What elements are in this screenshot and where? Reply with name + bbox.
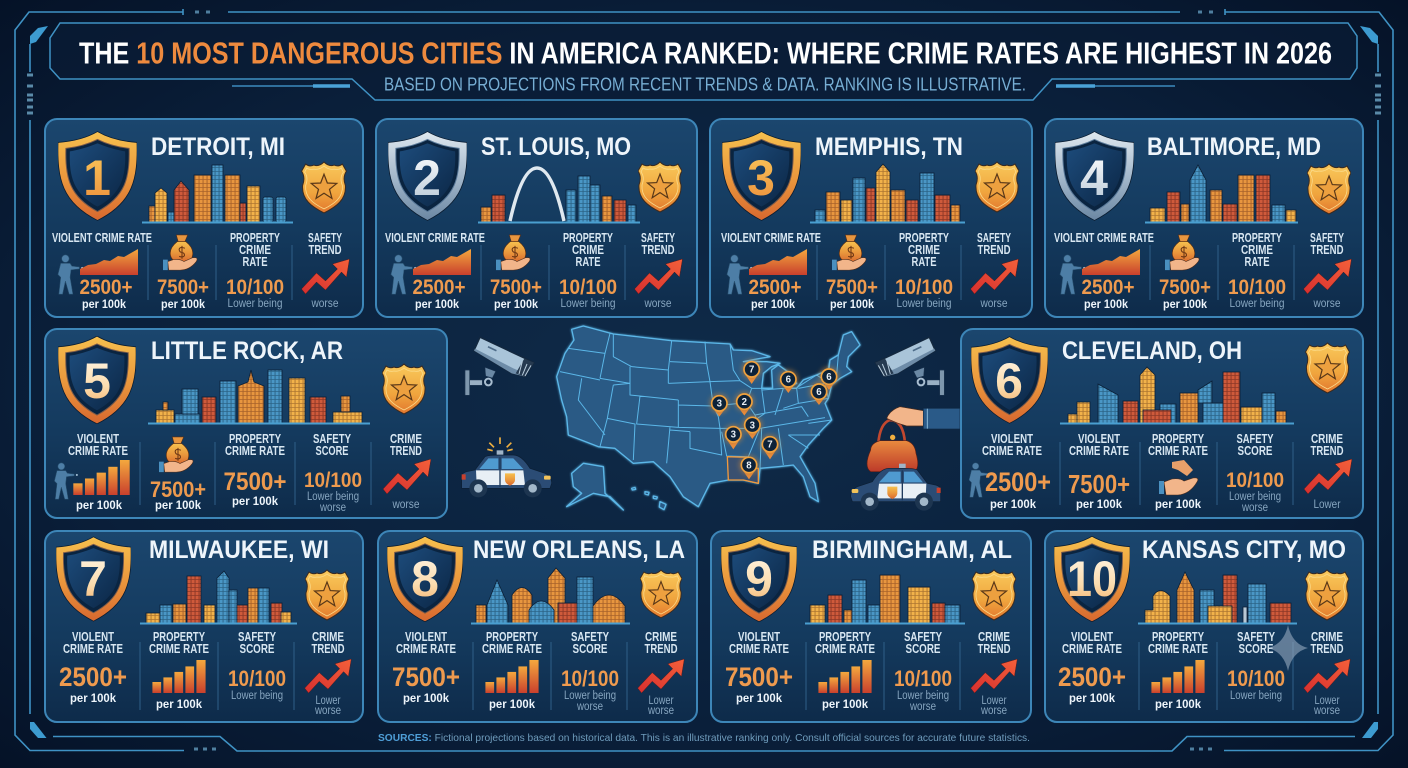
icon: police badge	[638, 162, 682, 212]
crime trend	[1304, 432, 1352, 511]
violent crime rate: VIOLENT CRIME RATE	[52, 231, 152, 245]
crime trend: TREND	[1310, 444, 1344, 458]
city name: DETROIT, MI	[151, 133, 285, 161]
icon: police badge	[972, 570, 1016, 620]
violent crime rate: VIOLENT CRIME RATE	[1054, 231, 1154, 245]
property crime rate	[1228, 231, 1286, 310]
safety score: SAFETY	[1237, 630, 1276, 644]
violent crime rate	[52, 231, 152, 311]
safety score: 10/100	[1227, 666, 1285, 691]
panel: Kansas City, MO	[1045, 531, 1363, 722]
safety score	[1226, 432, 1284, 514]
violent crime rate: VIOLENT	[1071, 630, 1113, 644]
violent crime rate: per 100k	[70, 691, 116, 705]
property crime rate: per 100k	[489, 697, 535, 711]
icon: police badge	[1306, 343, 1350, 393]
metrics: Baltimore	[1054, 231, 1352, 311]
property crime rate: RATE	[576, 255, 600, 269]
skyline	[1138, 572, 1297, 624]
card background	[45, 119, 363, 317]
card background	[378, 531, 697, 722]
violent crime rate	[54, 432, 130, 512]
safety score: SCORE	[1238, 444, 1272, 458]
property crime rate: Lower being	[896, 298, 952, 310]
violent crime rate: 2500+	[748, 276, 802, 299]
property value: 7500+	[157, 276, 209, 299]
property value: 7500+	[150, 477, 206, 502]
map pins	[711, 362, 837, 479]
violent crime rate	[1054, 231, 1154, 311]
rank shield 7: 7	[79, 551, 107, 607]
safety trend: SAFETY	[308, 231, 342, 245]
violent crime rate: VIOLENT	[72, 630, 114, 644]
property crime rate: PROPERTY	[563, 231, 613, 245]
property value: 7500+	[826, 276, 878, 299]
property crime rate: PROPERTY	[899, 231, 949, 245]
rank shield 6: 6	[995, 353, 1023, 409]
panel: Baltimore, MD	[1045, 119, 1363, 317]
property crime rate: Lower being	[1230, 298, 1284, 310]
violent crime rate: CRIME RATE	[729, 642, 789, 656]
property crime rate: CRIME	[908, 243, 940, 257]
violent crime rate: 2500+	[1058, 662, 1126, 692]
violent crime rate: per 100k	[403, 691, 449, 705]
property value: per 100k	[161, 297, 205, 311]
violent crime rate: per 100k	[82, 297, 126, 311]
icon: police badge	[1307, 164, 1351, 214]
US map with side icons	[461, 326, 960, 511]
property crime rate: CRIME RATE	[149, 642, 209, 656]
violent crime rate: 7500+	[725, 662, 793, 692]
violent crime rate: VIOLENT	[738, 630, 780, 644]
crime trend	[383, 432, 431, 511]
icon: hand with sleeve	[887, 407, 960, 429]
panel: Little Rock, AR	[45, 329, 447, 518]
skyline	[140, 571, 297, 624]
rank shield 9	[721, 536, 797, 622]
rank shield 10	[1054, 536, 1130, 622]
property crime rate: CRIME RATE	[482, 642, 542, 656]
violent crime rate: per 100k	[415, 297, 459, 311]
safety score: Lower being	[1229, 491, 1281, 503]
property crime rate	[895, 231, 953, 310]
metrics: Little Rock	[54, 432, 431, 514]
icon: police badge	[382, 364, 426, 414]
violent crime rate	[385, 231, 485, 311]
property crime rate: PROPERTY	[229, 432, 281, 446]
property crime rate: per 100k	[232, 494, 278, 508]
crime trend: worse	[647, 705, 674, 717]
Louisiana highlight	[727, 457, 758, 483]
property crime rate	[1148, 630, 1208, 711]
property crime rate: 10/100	[226, 276, 284, 299]
crime trend: worse	[392, 499, 420, 511]
city name: CLEVELAND, OH	[1062, 337, 1242, 365]
safety trend: TREND	[1310, 243, 1344, 257]
rank shield 9: 9	[745, 551, 773, 607]
icon: police badge	[640, 570, 682, 618]
violent crime rate: per 100k	[1069, 691, 1115, 705]
property crime rate: RATE	[912, 255, 936, 269]
city name: ST. LOUIS, MO	[481, 133, 631, 161]
property value: per 100k	[155, 498, 201, 512]
property crime rate: PROPERTY	[819, 630, 871, 644]
property crime rate: PROPERTY	[153, 630, 205, 644]
property value	[490, 235, 542, 311]
property crime rate	[482, 630, 542, 711]
crime trend: CRIME	[390, 432, 422, 446]
crime trend	[305, 630, 351, 717]
rank shield 3	[722, 132, 801, 220]
pin 7: 7	[749, 365, 754, 376]
property crime rate: CRIME	[572, 243, 604, 257]
property crime rate	[559, 231, 617, 310]
icon: police badge	[975, 162, 1019, 212]
property crime rate: RATE	[1244, 255, 1270, 269]
violent crime rate: per 100k	[1084, 297, 1128, 311]
property value	[157, 235, 209, 311]
skyline	[471, 568, 630, 624]
violent crime rate second column: per 100k	[1076, 497, 1122, 511]
violent crime rate: VIOLENT	[77, 432, 119, 446]
violent crime rate: per 100k	[751, 297, 795, 311]
rank shield 8	[387, 536, 463, 622]
sources note: SOURCES: Fictional projections based on historical data. This is an illustrative ranking only. Consult official sources for accurate future statistics.	[378, 732, 1030, 744]
safety score: worse	[1241, 502, 1268, 514]
property crime rate: PROPERTY	[1152, 432, 1204, 446]
city name: MEMPHIS, TN	[815, 133, 963, 161]
property crime rate: CRIME	[239, 243, 271, 257]
property crime rate: 10/100	[559, 276, 617, 299]
skyline	[478, 168, 640, 222]
safety trend: worse	[980, 298, 1008, 310]
metrics: Birmingham	[725, 630, 1017, 717]
pin 7: 7	[767, 440, 773, 451]
crime trend: CRIME	[312, 630, 344, 644]
crime trend: CRIME	[645, 630, 677, 644]
rank shield 7	[56, 537, 131, 621]
crime trend: worse	[1313, 705, 1340, 717]
safety score: SAFETY	[1236, 432, 1274, 446]
safety trend: worse	[311, 298, 338, 310]
city name: KANSAS CITY, MO	[1142, 536, 1346, 564]
skyline	[142, 165, 293, 222]
safety score: SAFETY	[238, 630, 277, 644]
pin 2: 2	[742, 397, 747, 408]
safety score: worse	[909, 701, 936, 713]
violent crime rate	[721, 231, 821, 311]
panel: New Orleans, LA	[378, 531, 697, 722]
violent crime rate second column	[1068, 432, 1130, 511]
pin 6: 6	[786, 375, 792, 386]
violent crime rate	[1058, 630, 1126, 705]
city name: BALTIMORE, MD	[1147, 133, 1321, 161]
property value	[1159, 235, 1211, 311]
crime trend: Lower	[316, 695, 341, 707]
violent crime rate: 2500+	[80, 276, 132, 299]
metrics: Memphis	[721, 231, 1018, 311]
skyline	[1060, 367, 1294, 424]
crime trend: CRIME	[1311, 432, 1343, 446]
property crime rate: per 100k	[1155, 697, 1201, 711]
icon: police badge	[302, 162, 346, 213]
violent crime rate: CRIME RATE	[68, 444, 128, 458]
crime trend: CRIME	[1311, 630, 1343, 644]
property crime rate: per 100k	[156, 697, 202, 711]
rank shield 5: 5	[83, 353, 111, 409]
violent crime rate: CRIME RATE	[396, 642, 456, 656]
icon: right security camera	[875, 337, 944, 395]
safety trend: TREND	[978, 243, 1010, 257]
safety score: Lower being	[897, 690, 949, 702]
violent crime rate: 2500+	[985, 467, 1051, 497]
icon: police car left	[461, 437, 552, 497]
crime trend: TREND	[390, 444, 422, 458]
panel: Milwaukee, WI	[45, 531, 363, 722]
rank shield 5	[58, 336, 136, 424]
property crime rate: per 100k	[1155, 497, 1201, 511]
icon: police badge	[305, 570, 349, 620]
property crime rate: Lower being	[228, 298, 282, 310]
property crime rate: CRIME RATE	[225, 444, 285, 458]
panel: St. Louis, MO	[376, 119, 697, 317]
safety trend	[970, 231, 1018, 310]
property crime rate: PROPERTY	[1152, 630, 1204, 644]
rank shield 1	[58, 132, 137, 220]
rank shield 6	[971, 337, 1048, 423]
rank shield 8: 8	[411, 551, 439, 607]
safety score: SAFETY	[313, 432, 352, 446]
crime trend: Lower	[1314, 499, 1341, 511]
violent crime rate	[969, 432, 1051, 511]
property value: 7500+	[1159, 276, 1211, 299]
property crime rate	[226, 231, 284, 310]
violent crime rate second column: 7500+	[1068, 469, 1130, 499]
metrics: St. Louis	[385, 231, 682, 311]
crime trend: Lower	[1314, 695, 1340, 707]
property crime rate: 7500+	[224, 468, 286, 496]
icon: red purse	[867, 420, 918, 472]
property crime rate	[149, 630, 209, 711]
pin 3: 3	[731, 430, 737, 441]
safety score	[1227, 630, 1285, 702]
skyline	[810, 164, 965, 222]
safety trend: SAFETY	[1310, 231, 1344, 245]
property crime rate: CRIME RATE	[1148, 642, 1208, 656]
rank shield 4	[1055, 132, 1134, 220]
card background	[1045, 119, 1363, 317]
violent crime rate second column: CRIME RATE	[1069, 444, 1129, 458]
crime trend: worse	[314, 705, 341, 717]
pin 8: 8	[746, 460, 752, 471]
safety trend: SAFETY	[641, 231, 675, 245]
panel: Cleveland, OH	[961, 329, 1363, 518]
safety score: 10/100	[228, 666, 286, 691]
violent crime rate: CRIME RATE	[63, 642, 123, 656]
crime trend: Lower	[648, 695, 674, 707]
property crime rate: per 100k	[822, 697, 868, 711]
safety score: SCORE	[906, 642, 940, 656]
safety trend: SAFETY	[977, 231, 1011, 245]
rank shield 2: 2	[413, 150, 441, 206]
safety score	[228, 630, 286, 702]
safety score: worse	[319, 502, 346, 514]
card background	[45, 531, 363, 722]
safety score: Lower being	[231, 690, 283, 702]
crime trend: TREND	[644, 642, 678, 656]
rank shield 3: 3	[747, 150, 775, 206]
violent crime rate: VIOLENT	[991, 432, 1033, 446]
property value	[150, 437, 206, 512]
property value: per 100k	[494, 297, 538, 311]
violent crime rate: VIOLENT CRIME RATE	[385, 231, 485, 245]
safety score	[304, 432, 362, 514]
safety trend: TREND	[642, 243, 674, 257]
safety trend	[302, 231, 350, 310]
safety score: 10/100	[894, 666, 952, 691]
rank shield 10: 10	[1067, 551, 1117, 607]
property crime rate: RATE	[242, 255, 268, 269]
card background	[1045, 531, 1363, 722]
map of the United States	[557, 326, 860, 510]
violent crime rate: 2500+	[1082, 276, 1134, 299]
card background	[376, 119, 697, 317]
title banner	[50, 23, 1357, 100]
violent crime rate: per 100k	[736, 691, 782, 705]
property crime rate: PROPERTY	[230, 231, 280, 245]
violent crime rate: VIOLENT	[405, 630, 447, 644]
pin 3: 3	[717, 399, 723, 410]
rank shield 4: 4	[1080, 150, 1108, 206]
pin 3: 3	[750, 420, 756, 431]
crime trend: worse	[980, 705, 1007, 717]
rank shield 1: 1	[83, 150, 111, 206]
violent crime rate: CRIME RATE	[1062, 642, 1122, 656]
crime trend	[1304, 630, 1350, 717]
property crime rate	[224, 432, 286, 508]
crime trend: Lower	[982, 695, 1007, 707]
property crime rate: CRIME	[1241, 243, 1273, 257]
skyline	[1145, 165, 1298, 222]
metrics: Cleveland	[969, 432, 1352, 514]
safety score: worse	[576, 701, 603, 713]
crime trend: TREND	[312, 642, 344, 656]
safety trend: worse	[1313, 298, 1340, 310]
crime trend: TREND	[1310, 642, 1344, 656]
property crime rate: 10/100	[1228, 276, 1286, 299]
property crime rate: PROPERTY	[486, 630, 538, 644]
property crime rate: PROPERTY	[1232, 231, 1282, 245]
safety score: SCORE	[572, 642, 608, 656]
icon: police car right	[851, 464, 941, 511]
property crime rate: CRIME RATE	[1148, 444, 1208, 458]
property crime rate: 10/100	[895, 276, 953, 299]
safety trend: TREND	[308, 243, 342, 257]
pin 6: 6	[826, 372, 832, 383]
violent crime rate: per 100k	[76, 498, 122, 512]
safety score: Lower being	[1230, 690, 1282, 702]
safety score: 10/100	[304, 469, 362, 492]
panel: Birmingham, AL	[711, 531, 1031, 722]
violent crime rate: per 100k	[990, 497, 1036, 511]
city name: BIRMINGHAM, AL	[812, 536, 1012, 564]
safety score: 10/100	[561, 666, 619, 691]
rank shield 2	[388, 132, 467, 220]
property crime rate	[815, 630, 875, 711]
violent crime rate: 2500+	[412, 276, 466, 299]
panel: Memphis, TN	[710, 119, 1032, 317]
violent crime rate	[725, 630, 793, 705]
safety score: SCORE	[316, 444, 348, 458]
property crime rate: CRIME RATE	[815, 642, 875, 656]
property crime rate: Lower being	[560, 298, 616, 310]
safety trend: worse	[644, 298, 672, 310]
safety score: SCORE	[240, 642, 274, 656]
city name: MILWAUKEE, WI	[149, 536, 329, 564]
property value: 7500+	[490, 276, 542, 299]
metrics: Milwaukee	[59, 630, 351, 717]
card background	[711, 531, 1031, 722]
metrics: Detroit	[52, 231, 350, 311]
crime trend: CRIME	[978, 630, 1010, 644]
property crime rate	[1148, 432, 1208, 511]
safety trend	[1304, 231, 1352, 310]
property value	[826, 235, 878, 311]
metrics: New Orleans	[392, 630, 684, 717]
property value: per 100k	[1163, 297, 1207, 311]
violent crime rate: 7500+	[392, 662, 460, 692]
crime trend	[971, 630, 1017, 717]
safety score: Lower being	[307, 491, 359, 503]
violent crime rate second column: VIOLENT	[1078, 432, 1120, 446]
safety score: 10/100	[1226, 469, 1284, 492]
safety score	[561, 630, 619, 713]
icon: left security camera	[465, 337, 534, 395]
safety score: SCORE	[1238, 642, 1274, 656]
metrics: Kansas City	[1058, 630, 1350, 717]
safety score: SAFETY	[571, 630, 610, 644]
crime trend: TREND	[978, 642, 1010, 656]
skyline	[148, 370, 370, 424]
crime trend	[638, 630, 684, 717]
violent crime rate	[392, 630, 460, 705]
safety score: Lower being	[564, 690, 616, 702]
card background	[961, 329, 1363, 518]
property value: per 100k	[830, 297, 874, 311]
card background	[45, 329, 447, 518]
icon: police badge	[1305, 570, 1349, 620]
safety score	[894, 630, 952, 713]
safety score: SAFETY	[904, 630, 943, 644]
city name: NEW ORLEANS, LA	[473, 536, 685, 564]
violent crime rate: VIOLENT CRIME RATE	[721, 231, 821, 245]
violent crime rate	[59, 630, 127, 705]
violent crime rate: CRIME RATE	[982, 444, 1042, 458]
skyline	[805, 575, 965, 624]
pin 6: 6	[816, 387, 822, 398]
panel: Detroit, MI	[45, 119, 363, 317]
violent crime rate: 2500+	[59, 662, 127, 692]
city name: LITTLE ROCK, AR	[151, 337, 343, 365]
subtitle: BASED ON PROJECTIONS FROM RECENT TRENDS & DATA. RANKING IS ILLUSTRATIVE.	[384, 74, 1026, 94]
card background	[710, 119, 1032, 317]
sparkle watermark	[1268, 625, 1308, 671]
safety trend	[634, 231, 682, 310]
